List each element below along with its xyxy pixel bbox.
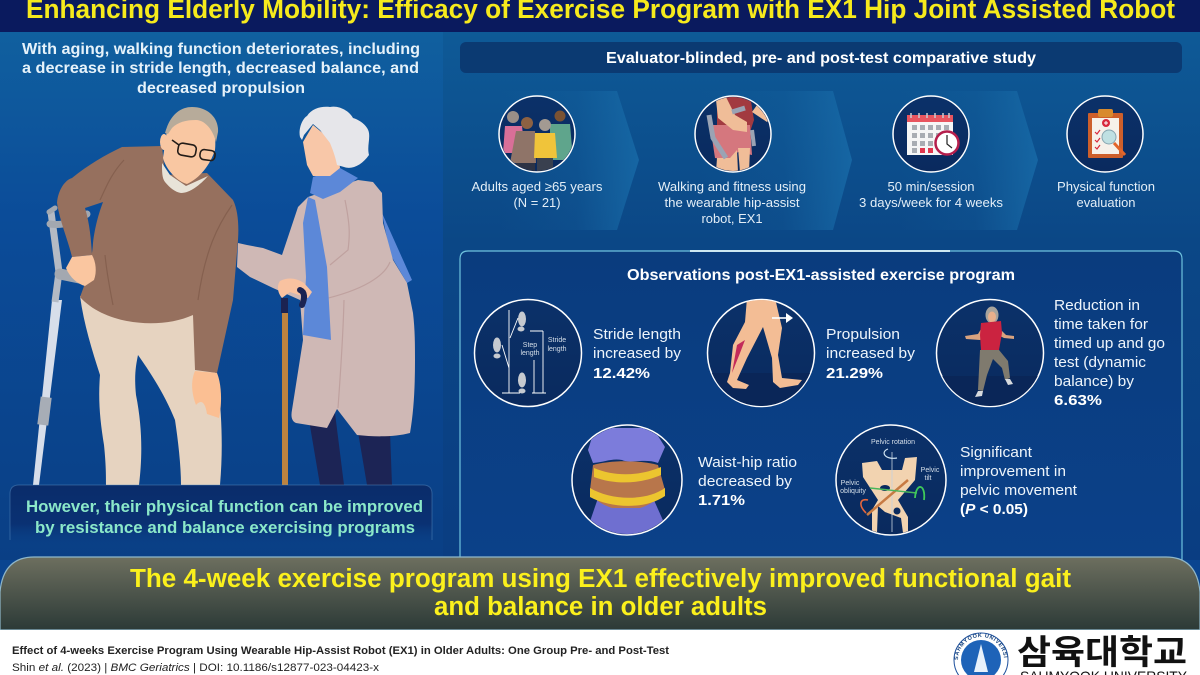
label: robot, EX1 — [702, 211, 762, 226]
study design heading: Evaluator-blinded, pre- and post-test comparative study — [606, 50, 1036, 67]
hand on knee — [192, 371, 221, 418]
text: balance) by — [1054, 373, 1135, 390]
step 4: evaluation — [1057, 96, 1155, 210]
conclusion band: and balance in older adults — [434, 593, 767, 621]
text: time taken for — [1054, 316, 1148, 333]
icon: pelvis: tilt — [924, 475, 932, 482]
heading: Observations post-EX1-assisted exercise program — [627, 267, 1015, 284]
hand on cane — [278, 279, 312, 298]
text: 21.29% — [826, 365, 883, 382]
label — [658, 179, 806, 226]
trousers — [80, 296, 222, 485]
logo: Sahmyook University: 삼육대학교 — [1017, 625, 1187, 674]
text: pelvic movement — [960, 482, 1078, 499]
panel: observations — [460, 251, 1182, 560]
icon: footprints: length — [547, 346, 567, 353]
label: Walking and fitness using — [658, 179, 806, 194]
icon: pelvis: obliquity — [840, 488, 866, 495]
text: (P < 0.05) — [960, 501, 1028, 518]
collar — [162, 163, 208, 193]
text: improvement in — [960, 463, 1066, 480]
text: 1.71% — [698, 492, 745, 509]
arrows: process chevrons — [500, 91, 1038, 230]
text: decreased by — [698, 473, 793, 490]
intro text: decreased propulsion — [137, 80, 305, 97]
text — [1054, 297, 1165, 409]
study design heading — [460, 42, 1182, 73]
label: Adults aged ≥65 years — [472, 179, 602, 194]
step 3: schedule — [859, 96, 1003, 210]
metric: stride length — [474, 300, 682, 406]
text: Reduction in — [1054, 297, 1140, 314]
label: evaluation — [1076, 195, 1136, 210]
step 1: participants — [472, 96, 602, 210]
cane handle — [300, 290, 304, 305]
text — [826, 326, 916, 382]
coat — [237, 180, 415, 436]
logo: Sahmyook University: SAHMYOOK UNIVERSITY — [954, 633, 1008, 660]
icon: footprints: length — [520, 350, 540, 357]
citation: Effect of 4-weeks Exercise Program Using Wearable Hip-Assist Robot (EX1) in Older Adults: One Group Pre- and Post-Test — [12, 645, 669, 657]
hand on crutch — [66, 255, 96, 286]
text: 12.42% — [593, 365, 650, 382]
icon: crutch — [33, 208, 94, 485]
text — [960, 444, 1078, 518]
text — [593, 326, 682, 382]
metric: timed up and go — [936, 297, 1165, 409]
icon: legs walking — [705, 298, 817, 408]
metric: propulsion — [705, 298, 916, 408]
label: (N = 21) — [514, 195, 560, 210]
citation: Shin et al. (2023) | BMC Geriatrics | DOI: 10.1186/s12877-023-04423-x — [12, 662, 380, 674]
icon: older adults — [499, 96, 575, 172]
intro text — [22, 41, 420, 97]
text: Significant — [960, 444, 1033, 461]
text: increased by — [826, 345, 916, 362]
icon: pelvis — [836, 425, 946, 535]
scarf — [303, 168, 358, 340]
icon: pelvis: Pelvic rotation — [871, 439, 915, 446]
sweater — [57, 146, 238, 373]
text — [698, 454, 797, 509]
icon: clipboard — [1067, 96, 1143, 172]
label: Physical function — [1057, 179, 1155, 194]
label — [859, 179, 1003, 210]
face — [303, 125, 340, 176]
callout: resistance and balance: by resistance and balance exercising programs — [35, 519, 415, 537]
intro text: With aging, walking function deteriorates, including — [22, 41, 420, 58]
head — [163, 118, 215, 184]
label — [1057, 179, 1155, 210]
icon: footprints: Stride — [548, 337, 566, 344]
illustration: elderly man with crutch — [33, 107, 238, 485]
icon: pelvis: Pelvic — [841, 480, 860, 487]
text: Stride length — [593, 326, 681, 343]
text: timed up and go — [1054, 335, 1165, 352]
text: increased by — [593, 345, 682, 362]
text: Waist-hip ratio — [698, 454, 797, 471]
text: 6.63% — [1054, 392, 1102, 409]
icon: wearable hip robot — [695, 95, 771, 172]
icon: footprints: Step — [523, 342, 537, 349]
metric: waist-hip ratio — [572, 425, 797, 536]
conclusion band: The 4-week exercise program using EX1 effectively improved functional gait — [130, 565, 1072, 593]
icon: waist measured — [572, 425, 682, 536]
icon: footprints — [474, 300, 582, 406]
legs — [309, 405, 392, 485]
icon: balancing woman — [936, 300, 1044, 408]
text: Propulsion — [826, 326, 900, 343]
conclusion band — [0, 557, 1200, 630]
callout: resistance and balance: However, their physical function can be improved — [26, 498, 423, 516]
icon: pelvis: Pelvic — [921, 467, 940, 474]
label: 50 min/session — [888, 179, 974, 194]
illustration: elderly woman with cane — [237, 107, 415, 485]
hair — [165, 107, 218, 142]
icon: cane — [281, 298, 288, 485]
step 2: robot exercise — [658, 95, 806, 226]
hair — [300, 107, 369, 168]
intro text: a decrease in stride length, decreased balance, and — [22, 60, 419, 77]
label: the wearable hip-assist — [664, 195, 800, 210]
citation — [12, 645, 669, 674]
icon: calendar and clock — [893, 96, 969, 172]
callout: resistance and balance — [10, 485, 432, 545]
label — [472, 179, 602, 210]
text: test (dynamic — [1054, 354, 1147, 371]
label: 3 days/week for 4 weeks — [859, 195, 1003, 210]
back scarf — [382, 213, 412, 283]
glasses — [172, 140, 216, 161]
metric: pelvic movement — [836, 425, 1078, 535]
